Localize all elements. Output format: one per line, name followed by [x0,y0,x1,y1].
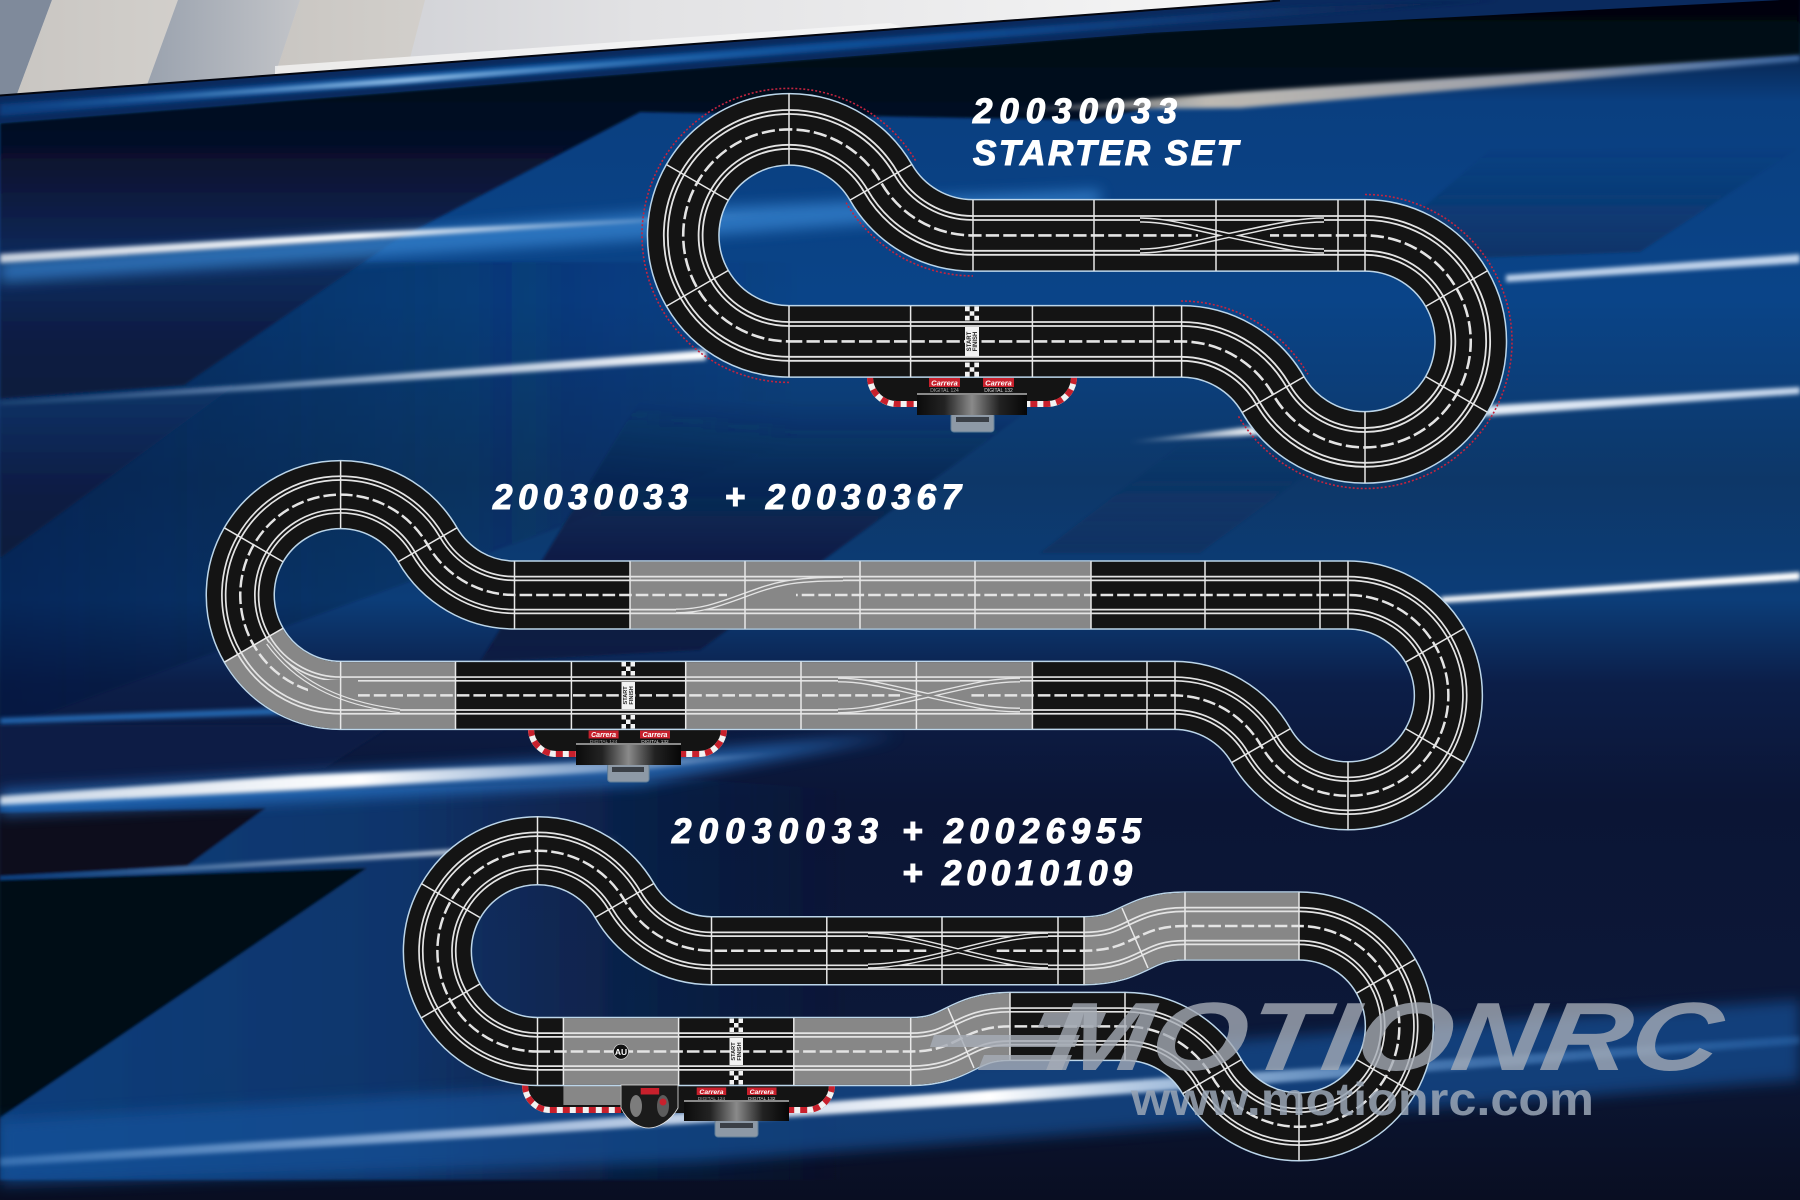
Carrera logos [929,378,1014,394]
watermark: MotionRC logo: MOTIONRC [1041,983,1732,1091]
Carrera logos: DIGITAL 132 [641,739,669,745]
track section joints [666,93,1488,483]
red dotted extension outline [642,88,1512,488]
track section joints [224,461,1464,830]
Carrera logos: Carrera [750,1089,774,1096]
heading: third layout label: + 20026955 [902,812,1142,851]
top blue band [0,0,1800,123]
Carrera logos [697,1088,776,1102]
top silver banner with slanted stripes [0,0,1280,96]
control unit [684,1100,789,1137]
start finish line: FINISH [973,332,979,351]
lane slots and dashed centre line [418,832,1419,1146]
Carrera logos: Carrera [591,732,616,739]
heading: third layout label: + 20010109 [902,854,1133,893]
heading: starter set label: 20030033 [972,92,1178,131]
track 2: starter set plus 20030367 [200,450,1500,840]
track 3: starter set plus 20026955 and 20010109 [390,805,1445,1170]
watermark: MotionRC logo [930,983,1732,1091]
track section joints [421,817,1415,1160]
heading: starter set label [972,92,1241,173]
start finish line [622,662,635,728]
Carrera logos: DIGITAL 124 [698,1096,726,1102]
Carrera logos [589,730,670,745]
heading: starter set label: STARTER SET [973,134,1241,173]
asphalt track surface [683,129,1471,447]
start finish line: START [967,331,973,351]
start finish line: START [623,686,629,705]
heading: second layout label: 20030033 + 20030367 [492,478,963,517]
lane slots and dashed centre line [662,109,1492,468]
Carrera logos: DIGITAL 124 [930,388,959,394]
grey extension sections [254,595,1091,695]
pit area with red and white curbs [867,377,1077,407]
asphalt track surface [240,495,1448,796]
Carrera logos: Carrera [699,1089,724,1096]
control unit [917,393,1027,432]
Carrera logos: DIGITAL 124 [590,739,618,745]
track 1: starter set [630,80,1512,495]
autonomous car marker: AU [615,1047,627,1057]
wireless controller panel [621,1085,678,1128]
autonomous car marker [614,1044,628,1059]
lane slots and dashed centre line [221,475,1468,815]
Carrera logos: Carrera [985,378,1012,387]
Carrera logos: DIGITAL 132 [748,1096,776,1102]
pit area with red and white curbs [528,729,727,757]
Carrera logos: Carrera [643,732,668,739]
pit area with red and white curbs [522,1085,835,1113]
asphalt track surface [437,851,1399,1127]
start finish line: FINISH [737,1042,743,1061]
watermark: website address: www.motionrc.com [1130,1073,1594,1125]
grey extension sections [563,926,1299,1052]
heading: third layout label: 20030033 [671,812,879,851]
start finish line: FINISH [629,686,635,705]
start finish line: START [731,1042,737,1061]
start finish line [730,1018,743,1084]
start finish line [965,306,979,376]
Carrera logos: DIGITAL 132 [984,388,1013,394]
Carrera logos: Carrera [931,378,958,387]
control unit [576,743,681,782]
heading: third layout label [671,812,1142,893]
